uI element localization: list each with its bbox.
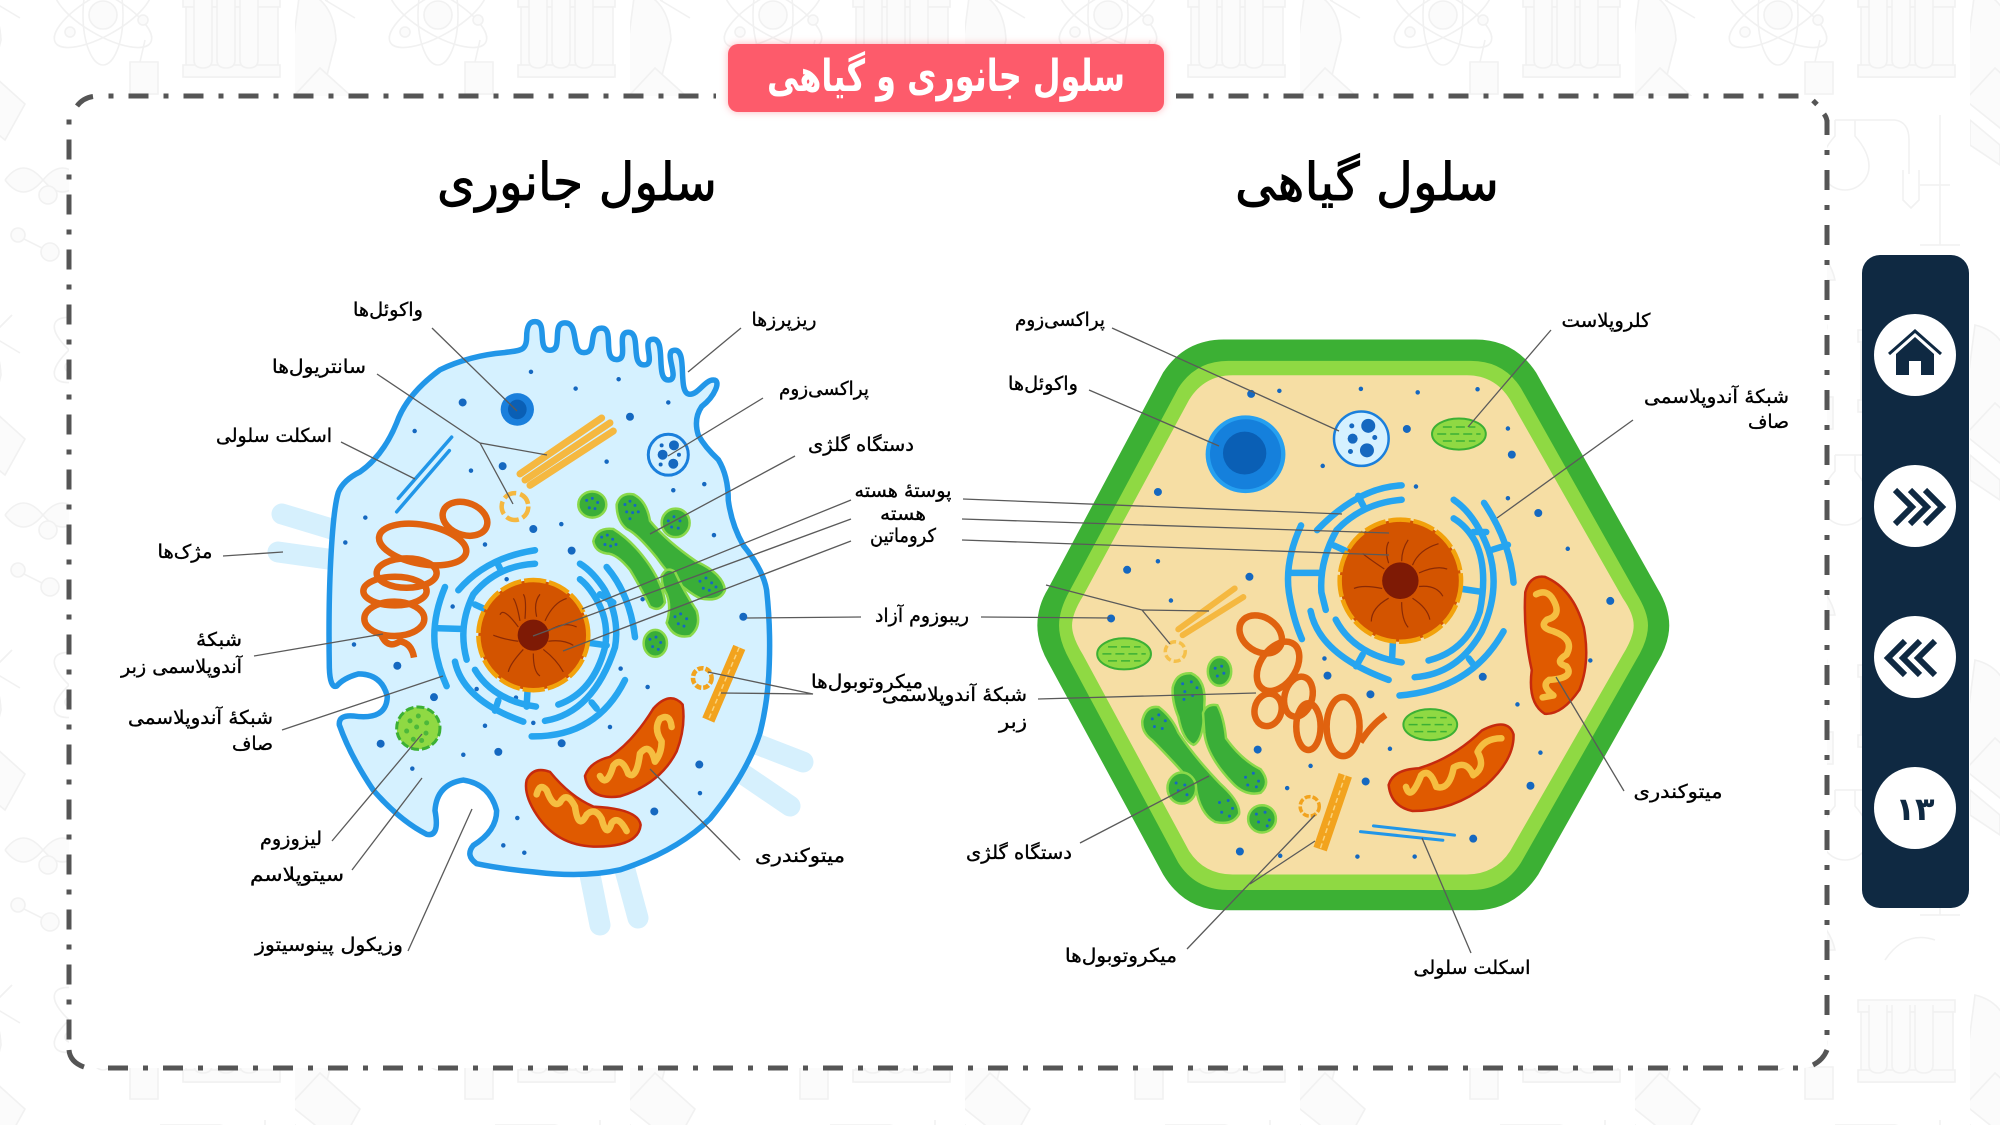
callout: cytoskeleton: اسکلت سلولی [1414,957,1530,979]
callout: cytoskeleton: اسکلت سلولی [216,425,332,447]
callout: microtubules: میکروتوبول‌ها [811,671,923,693]
smooth endoplasmic reticulum [363,497,490,658]
callout: vacuoles: واکوئل‌ها [1008,373,1078,395]
callout: mitochondria: میتوکندری [755,845,845,867]
callout: chromatin: کروماتین [870,525,937,547]
callout: free ribosome [981,617,1110,618]
callout: smooth ER: شبکهٔ آندوپلاسمی [128,705,273,729]
callout: smooth ER: صاف [232,733,273,755]
callout: golgi: دستگاه گلژی [808,433,914,456]
callout: smooth ER: صاف [1748,411,1789,433]
callout: nucleus [533,503,926,636]
nucleus [1340,520,1461,642]
cell membrane [1059,361,1648,890]
callout: nuclear envelope and nucleus and chromatin lines [962,499,1389,555]
heading: animal cell: سلول جانوری [437,153,717,213]
callout: microtubules [1065,815,1315,967]
main frame with dash-dot border [69,96,1827,1068]
centriole bars [520,418,613,485]
callout: cytoplasm [250,778,422,886]
callout: chloroplast: کلروپلاست [1562,310,1651,332]
callout: chloroplast [1468,310,1651,427]
callout: lysosome [260,734,422,850]
callout: golgi: دستگاه گلژی [966,841,1072,864]
icon: next button [1874,465,1956,547]
chloroplast centre [1403,709,1457,740]
centrosome ring [502,493,528,520]
callout: free ribosome: ریبوزوم آزاد [875,603,969,627]
callout: centrioles: سانتریول‌ها [272,356,366,378]
vacuole [501,393,534,426]
callout: rough ER: آندوپلاسمی زبر [120,654,243,678]
nucleus [478,580,588,690]
page number [1874,767,1956,849]
free ribosomes [345,372,743,853]
callout: smooth ER [128,676,443,755]
microtubule [1320,775,1345,849]
microtubule [708,647,739,720]
callout: lysosome: لیزوزوم [260,828,322,850]
cell wall [1037,339,1669,910]
callout: nuclear envelope: پوستهٔ هسته [854,480,952,502]
callout: pinocytosis vesicle [254,809,472,956]
callout: rough ER: شبکهٔ آندوپلاسمی [882,682,1027,706]
page number: ۱۳ [1895,790,1935,828]
callout: centrioles [272,356,547,504]
callout: peroxisome: پراکسی‌زوم [1015,309,1105,331]
callout: cytoplasm: سیتوپلاسم [250,864,344,886]
mitochondrion bottom [1389,725,1514,811]
callout: mitochondria: میتوکندری [1634,781,1722,803]
callout: vacuoles [353,299,517,411]
peroxisome [1334,411,1389,466]
diagram: animal cell [278,322,803,925]
chloroplast left [1097,638,1151,669]
animal cell body [329,322,770,875]
lysosome [397,707,440,749]
callout: nucleus: هسته [880,503,926,525]
callout: peroxisome [1015,309,1339,431]
microtubule ring [1300,797,1319,816]
title badge [716,44,1176,112]
callout: microvilli [688,309,816,372]
smooth endoplasmic reticulum [1231,608,1386,756]
heading: plant cell: سلول گیاهی [1235,153,1499,213]
rough endoplasmic reticulum [1288,485,1514,695]
callout: golgi [650,433,914,534]
callout: rough ER [882,682,1256,733]
title badge: سلول جانوری و گیاهی [767,50,1125,102]
callout: mitochondria [1556,677,1722,803]
callout: microtubules [708,671,923,694]
vacuole [1206,415,1285,493]
callout: vacuoles: واکوئل‌ها [353,299,423,321]
peroxisome [648,434,688,475]
callout: cilia: مژک‌ها [158,541,212,563]
callout: cilia [158,541,283,563]
cytoplasm [1072,375,1634,874]
cell membrane [329,322,770,875]
mitochondrion lower [526,770,641,847]
callout: microvilli: ریزپرزها [752,309,816,331]
free ribosomes [1111,389,1610,857]
navigation panel [1862,255,1969,908]
centrosome ring [1165,642,1185,661]
diagram: plant cell [1037,339,1669,910]
callout: smooth ER [1497,384,1789,518]
chloroplast top [1432,418,1486,450]
callout: centrioles [1046,585,1209,644]
callout: microtubules: میکروتوبول‌ها [1065,945,1177,967]
microtubule ring [693,668,712,688]
icon: previous button [1874,616,1956,698]
plant cell labels [882,309,1789,979]
golgi apparatus [578,491,725,657]
mitochondrion upper [585,698,684,797]
cilia [278,514,803,925]
animal cell labels [120,299,969,956]
cytoskeleton [397,437,452,512]
callout: nuclear envelope [582,480,952,609]
callout: rough ER: زبر [998,711,1027,733]
callout: peroxisome [668,378,869,456]
callout: golgi [966,776,1209,864]
centriole bars [1178,588,1243,635]
cytoskeleton [1360,826,1455,840]
callout: rough ER: شبکهٔ [196,629,242,651]
callout: cytoskeleton [1414,838,1530,979]
rough endoplasmic reticulum [434,550,635,736]
callout: vacuoles [1008,373,1219,446]
callout: chromatin [563,525,937,651]
callout: smooth ER: شبکهٔ آندوپلاسمی [1644,384,1789,408]
golgi apparatus [1142,657,1276,832]
callout: peroxisome: پراکسی‌زوم [779,378,869,400]
callout: mitochondria [650,769,845,867]
icon: home button [1874,314,1956,396]
callout: pinocytosis vesicle: وزیکول پینوسیتوز [254,934,403,956]
callout: rough ER [120,629,383,678]
mitochondrion right [1525,577,1586,714]
callout: cytoskeleton [216,425,415,479]
